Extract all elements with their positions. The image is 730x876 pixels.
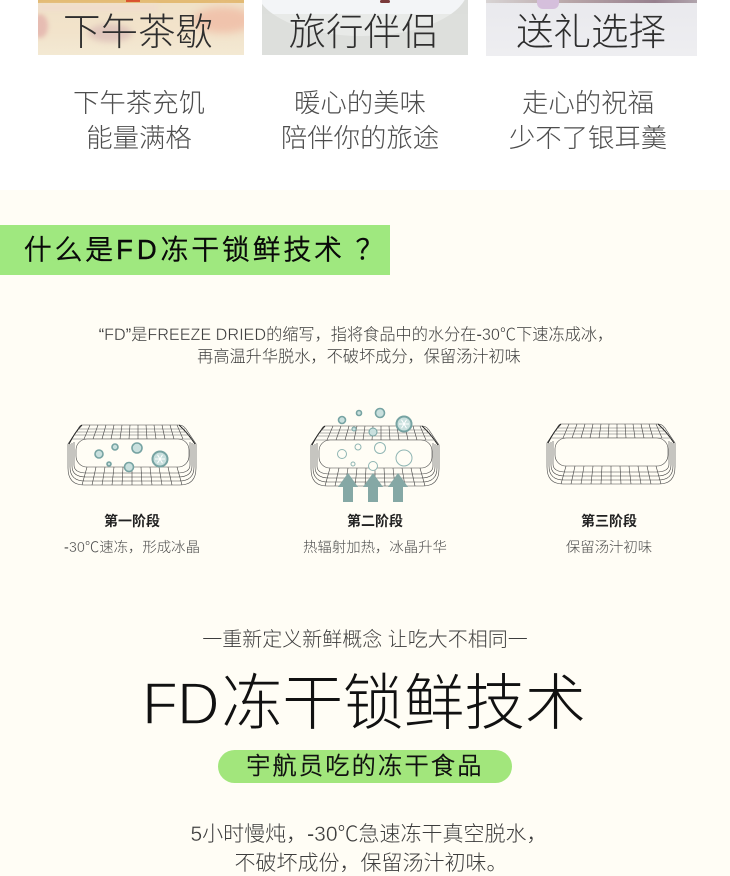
diagram: stage two tray	[310, 408, 440, 502]
closing text: 不破坏成份，保留汤汁初味。	[234, 852, 507, 875]
photo card: afternoon tea: 下午茶歇	[63, 11, 213, 53]
photo card: travel companion	[262, 0, 468, 55]
closing text	[190, 823, 548, 875]
caption: gift: 走心的祝福	[522, 88, 654, 118]
pill subtitle	[218, 750, 512, 783]
main title: FD冻干锁鲜技术	[142, 669, 586, 737]
diagram: stage three tray	[546, 424, 676, 484]
pill subtitle: 宇航员吃的冻干食品	[246, 753, 484, 780]
tagline: 一重新定义新鲜概念 让吃大不相同一	[202, 629, 528, 651]
photo card: travel companion: 旅行伴侣	[288, 11, 438, 53]
ice crystals	[95, 443, 168, 472]
caption: afternoon tea: 下午茶充饥	[73, 88, 205, 118]
photo card: gift choice	[486, 0, 697, 56]
heat arrows	[338, 473, 408, 502]
vapour bubbles	[338, 442, 412, 470]
stage three label	[566, 513, 652, 556]
intro paragraph	[99, 326, 613, 366]
photo card: gift choice: 送礼选择	[516, 11, 666, 53]
cream background section	[0, 190, 730, 876]
caption: travel	[281, 88, 439, 153]
caption: gift: 少不了银耳羹	[509, 123, 667, 153]
stage one label: -30℃速冻，形成冰晶	[64, 540, 200, 556]
caption: travel: 陪伴你的旅途	[281, 123, 439, 153]
banner heading: 什么是FD冻干锁鲜技术 ？	[24, 234, 387, 265]
stage two label	[303, 513, 447, 556]
caption: travel: 暖心的美味	[294, 88, 426, 118]
banner heading	[0, 225, 390, 275]
stage three label: 保留汤汁初味	[566, 540, 652, 556]
stage one label	[64, 513, 200, 556]
stage three label: 第三阶段	[581, 513, 637, 529]
caption: gift	[509, 88, 667, 153]
caption: afternoon tea	[73, 88, 205, 153]
stage two label: 热辐射加热，冰晶升华	[303, 540, 447, 556]
stage two label: 第二阶段	[347, 513, 403, 529]
diagram: stage one tray	[68, 424, 196, 486]
caption: afternoon tea: 能量满格	[86, 123, 192, 153]
stage one label: 第一阶段	[104, 513, 160, 529]
intro paragraph: “FD”是FREEZE DRIED的缩写，指将食品中的水分在-30℃下速冻成冰，	[99, 326, 613, 344]
rising crystals	[338, 408, 412, 436]
photo card: afternoon tea	[38, 0, 244, 55]
closing text: 5小时慢炖，-30℃急速冻干真空脱水，	[190, 823, 548, 846]
intro paragraph: 再高温升华脱水，不破坏成分，保留汤汁初味	[197, 348, 521, 366]
